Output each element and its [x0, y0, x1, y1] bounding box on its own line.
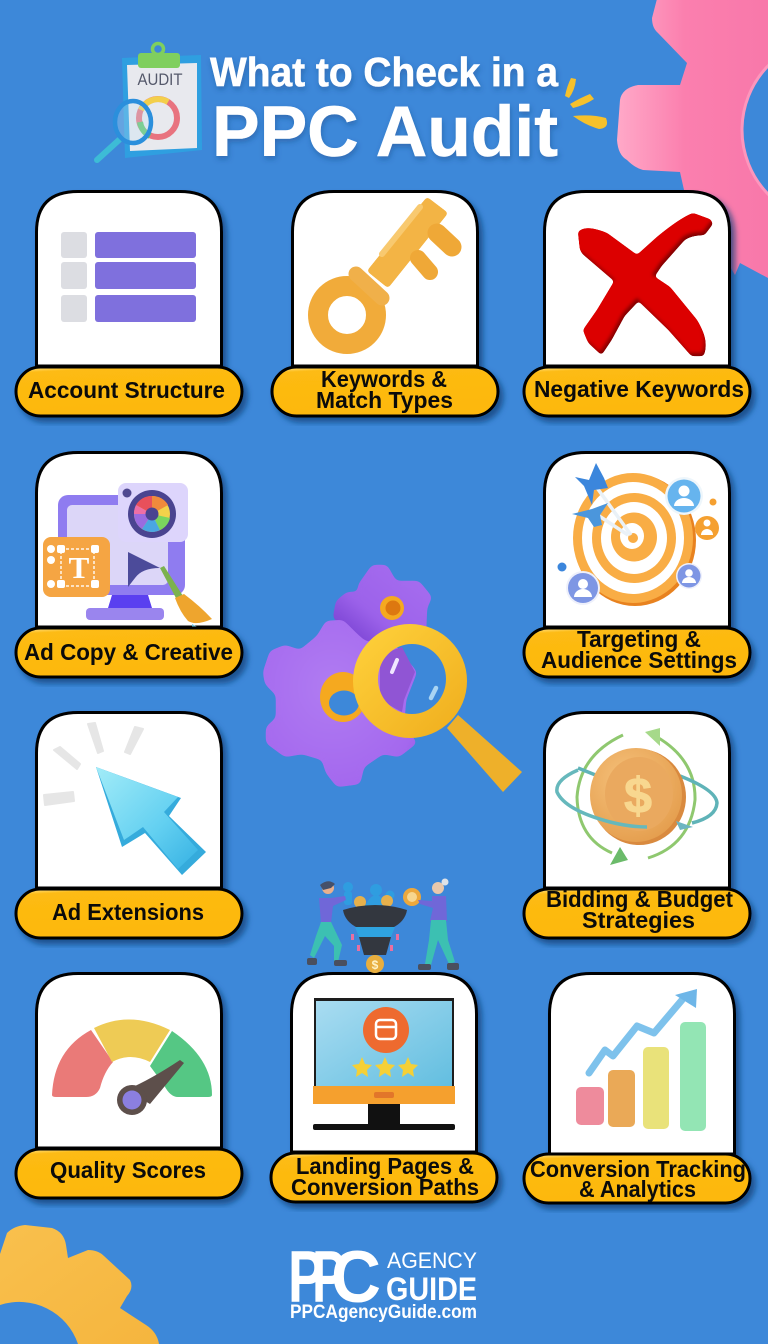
label — [271, 1153, 497, 1202]
label: Ad Copy & Creative — [24, 639, 233, 665]
card — [36, 192, 222, 366]
icon: audit clipboard: AUDIT — [138, 70, 182, 89]
illustration: funnel and people — [307, 878, 459, 973]
icon: target — [558, 463, 719, 606]
icon: red X — [578, 213, 714, 356]
icon: gauge — [52, 1019, 212, 1115]
left person — [307, 881, 347, 966]
logo mark: C — [331, 1237, 381, 1318]
card — [292, 192, 478, 366]
funnel: $ — [372, 958, 379, 972]
label: Negative Keywords — [534, 376, 744, 402]
icon: cursor — [44, 723, 206, 875]
title line 1: What to Check in a — [210, 49, 559, 95]
magnifier ring — [353, 624, 467, 738]
logo mark: P — [312, 1237, 346, 1318]
panel: quality scores — [16, 974, 242, 1198]
card — [550, 974, 734, 1154]
label: Conversion Paths — [291, 1174, 479, 1200]
card — [544, 452, 730, 627]
logo mark — [288, 1237, 381, 1318]
label: Strategies — [582, 907, 695, 933]
label — [272, 366, 498, 416]
label: Landing Pages & — [296, 1153, 474, 1179]
label: Audience Settings — [541, 647, 737, 673]
icon: monitor with stars — [313, 998, 455, 1130]
label: & Analytics — [579, 1176, 696, 1202]
card — [544, 192, 730, 366]
icon: creative monitor: T — [69, 550, 90, 585]
title — [210, 49, 559, 172]
card — [36, 712, 222, 888]
icon: audit clipboard — [97, 44, 202, 160]
magnifier handle — [447, 715, 522, 792]
logo mark: P — [288, 1237, 324, 1318]
funnel — [343, 882, 421, 973]
label — [524, 1154, 750, 1203]
card — [292, 974, 476, 1152]
icon: list — [61, 232, 196, 322]
icon: coin with arrows: $ — [624, 768, 652, 824]
panel: account structure — [16, 192, 242, 416]
right person — [418, 878, 459, 970]
panel: ad copy and creative — [16, 452, 242, 677]
panel: keywords — [272, 192, 498, 416]
panel: landing pages — [271, 974, 497, 1202]
icon: sparks — [565, 78, 607, 129]
label: Account Structure — [28, 377, 225, 403]
label — [16, 367, 242, 416]
label: Conversion Tracking — [530, 1156, 746, 1182]
logo url: PPCAgencyGuide.com — [290, 1302, 477, 1323]
label: Bidding & Budget — [546, 886, 733, 912]
decorative pink gear — [617, 0, 768, 278]
label — [16, 628, 242, 677]
label — [16, 1149, 242, 1198]
large purple gear — [263, 620, 417, 787]
card — [544, 712, 730, 888]
small purple gear — [333, 565, 432, 646]
lens tint — [380, 647, 415, 712]
logo — [288, 1237, 477, 1323]
panel: negative keywords — [524, 192, 750, 416]
icon: rising bars — [576, 989, 706, 1131]
panel: conversion tracking — [524, 974, 750, 1203]
lens highlights — [392, 660, 436, 698]
label — [524, 367, 750, 416]
label — [524, 626, 750, 677]
label: Ad Extensions — [52, 899, 204, 925]
card — [36, 974, 222, 1148]
icon: coin with arrows — [557, 728, 717, 865]
label — [16, 889, 242, 938]
card — [36, 452, 222, 627]
logo guide: GUIDE — [386, 1271, 477, 1307]
label — [524, 886, 750, 938]
panel: bidding and budget — [524, 712, 750, 938]
label: Keywords & — [321, 366, 447, 392]
decorative yellow gear — [0, 1225, 159, 1344]
label: Quality Scores — [50, 1157, 206, 1183]
logo agency: AGENCY — [387, 1248, 477, 1273]
label: Targeting & — [577, 626, 701, 652]
panel: ad extensions — [16, 712, 242, 938]
illustration: gears and magnifier — [263, 565, 522, 792]
title line 2: PPC Audit — [212, 93, 558, 172]
icon: key — [318, 197, 452, 344]
panel: targeting — [524, 452, 750, 677]
icon: creative monitor — [43, 483, 224, 636]
label: Match Types — [316, 387, 453, 413]
